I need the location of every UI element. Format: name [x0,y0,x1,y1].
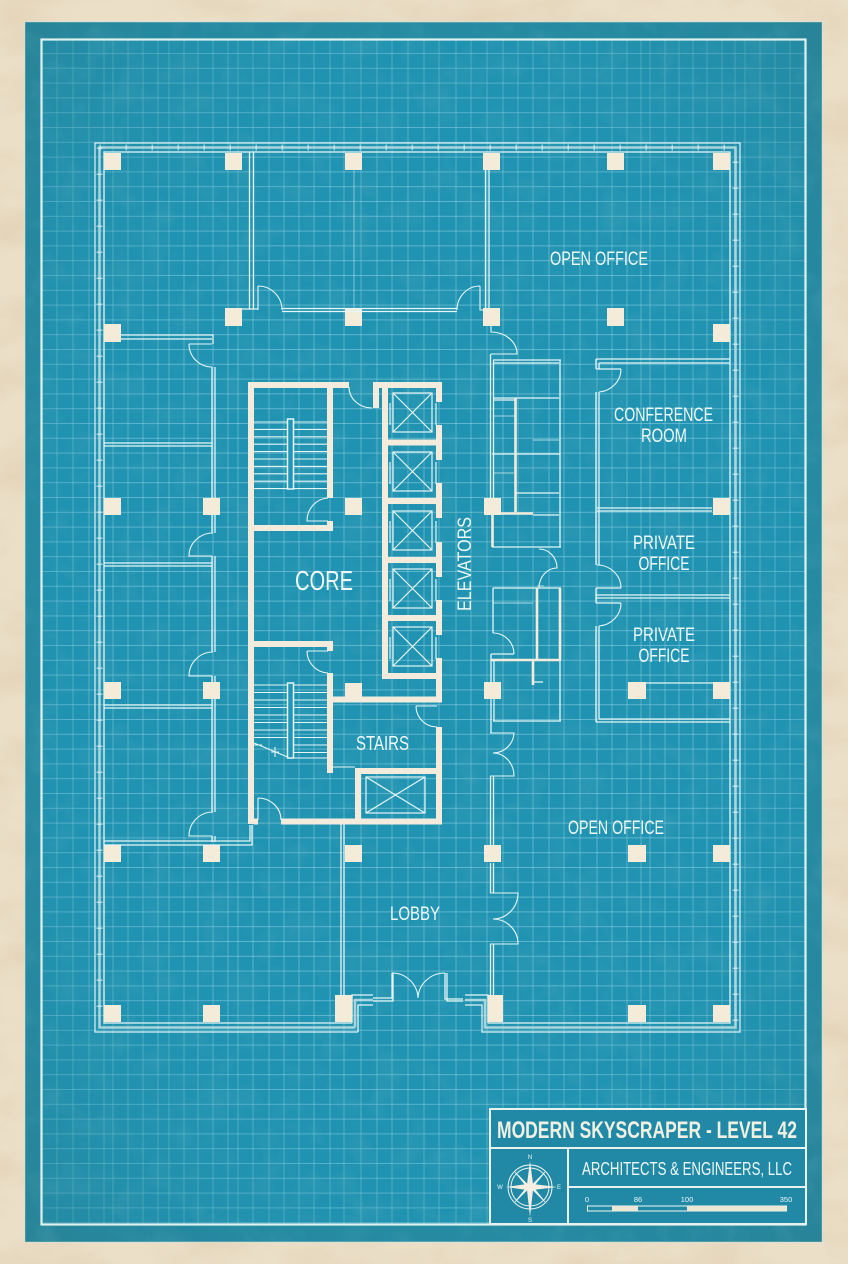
room label: private office upper: OFFICE [638,554,690,575]
core walls [248,382,442,824]
room label: private office upper [633,533,695,575]
structural columns [104,153,730,1022]
title block [490,1109,806,1224]
scale bar: 350 [780,1195,792,1204]
room label: private office upper: PRIVATE [633,533,695,554]
left office partitions and doors [104,335,252,845]
scale bar [585,1195,792,1211]
scale bar: 0 [585,1195,589,1204]
room label: conference room [614,405,713,447]
scale bar: 100 [681,1195,693,1204]
upper stairs [254,419,327,489]
room label: private office lower [633,625,695,667]
room label: conference room: CONFERENCE [614,405,713,426]
lower stairs [254,683,327,758]
service rooms [490,354,561,733]
room label: open office south: OPEN OFFICE [568,818,664,839]
icon: compass rose: W [497,1185,503,1191]
icon: compass rose [497,1155,561,1224]
room label: lobby: LOBBY [390,904,440,925]
room label: core: CORE [295,565,353,596]
right offices [596,359,730,722]
building exterior walls [95,143,740,1032]
scale bar: 86 [634,1195,642,1204]
icon: compass rose: N [528,1155,532,1161]
lobby walls and entrance doors [341,733,518,1001]
room label: private office lower: OFFICE [638,646,690,667]
elevator cars [366,393,436,813]
room label: conference room: ROOM [641,426,687,447]
icon: compass rose: E [557,1185,561,1191]
room label: stairs: STAIRS [356,733,409,755]
room label: private office lower: PRIVATE [633,625,695,646]
room label: elevators: ELEVATORS [455,517,476,611]
elevator shaft walls [373,382,442,702]
top office partitions and doors [242,152,517,354]
room label: open office north: OPEN OFFICE [550,249,648,270]
icon: compass rose: S [528,1218,532,1224]
